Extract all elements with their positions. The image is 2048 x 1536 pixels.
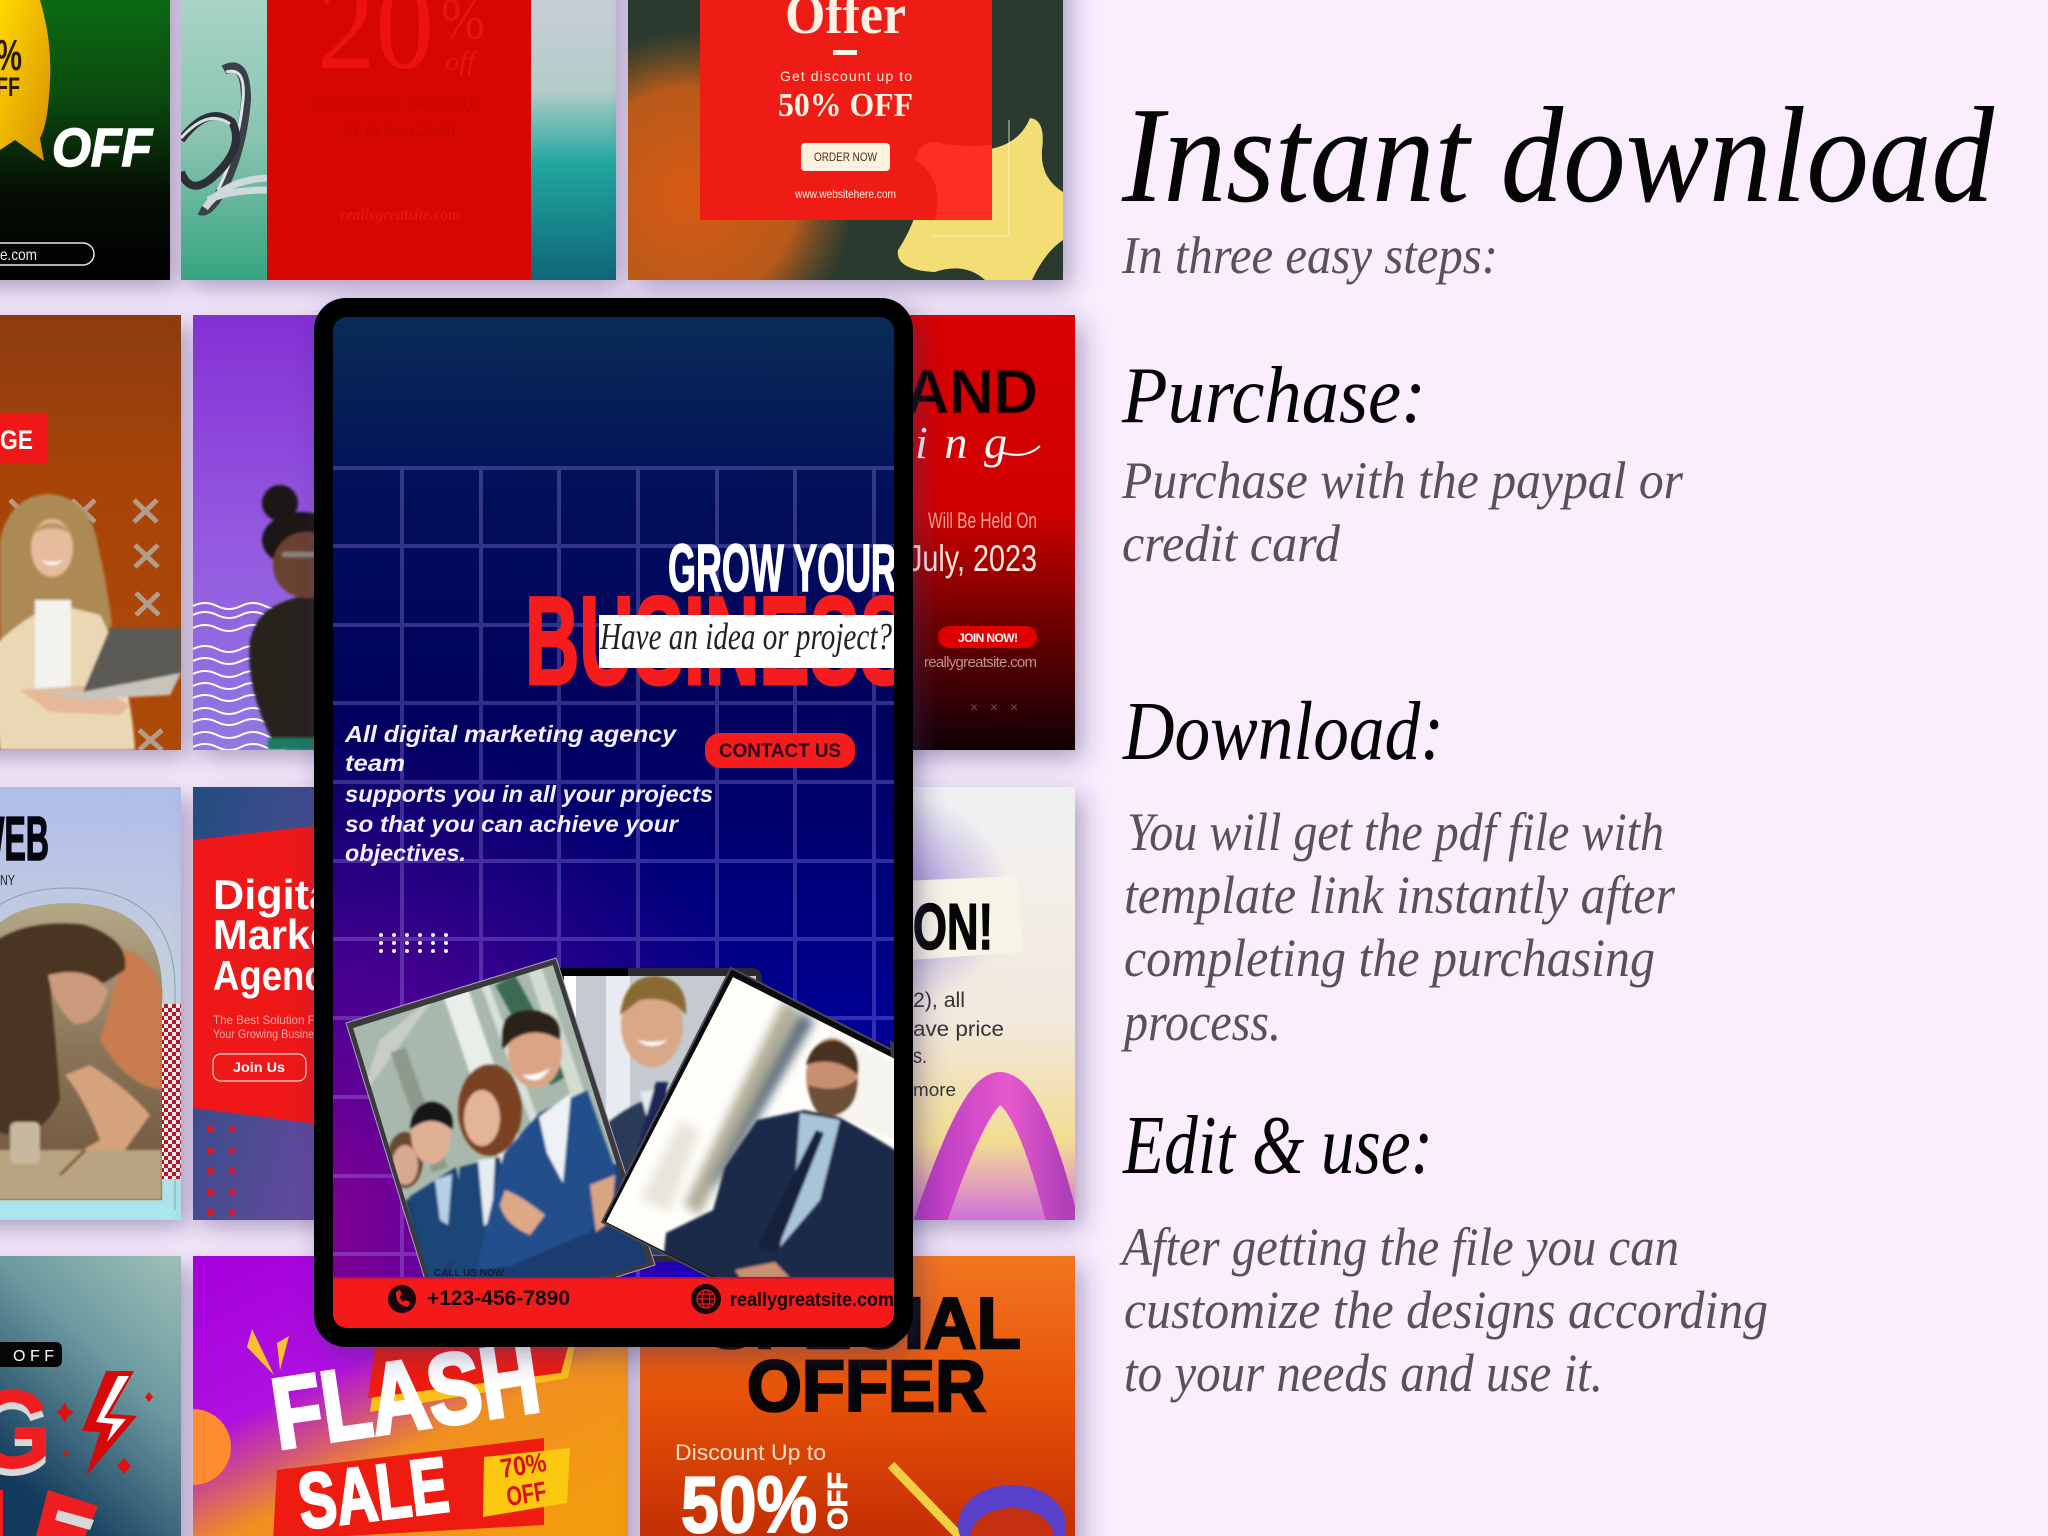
tile: pastel announcement template with pink arch: 2), all [913, 989, 965, 1012]
tile: special offer template [640, 1256, 1075, 1536]
tile: teal sale template with lightning bolt: OFF [13, 1348, 54, 1365]
tile: red event template with join button: JOIN NOW! [958, 631, 1018, 645]
step text: download: process. [1120, 992, 1281, 1052]
tile: green OFF badge template: e.com [0, 247, 37, 264]
tablet mockup [314, 298, 998, 1358]
tile: special offer template: Discount Up to [675, 1440, 826, 1465]
headline: grow your business: GROW YOUR [668, 531, 897, 606]
tile: red digital marketing agency template: Join Us [233, 1059, 285, 1075]
step text: download: You will get the pdf file with [1127, 802, 1664, 862]
tile: red event template with join button: × × × [970, 699, 1018, 715]
tile: flash sale template [155, 1256, 628, 1536]
headline: grow your business [529, 543, 894, 686]
step text: download: completing the purchasing [1124, 928, 1655, 988]
tile: green OFF badge template: OFF [52, 118, 154, 178]
step text: edit and use: After getting the file you can [1119, 1217, 1679, 1277]
step text: download: template link instantly after [1124, 865, 1676, 925]
step text: edit and use [1119, 1217, 1768, 1403]
step text: purchase: credit card [1122, 515, 1340, 573]
step text: purchase [1121, 452, 1683, 573]
step text: purchase: Purchase with the paypal or [1121, 452, 1683, 510]
tile: pastel announcement template with pink arch: more [913, 1080, 956, 1100]
website: reallygreatsite.com [730, 1290, 894, 1311]
tile: red event template with join button: ing [915, 417, 1007, 468]
step text: edit and use: customize the designs according [1124, 1280, 1768, 1340]
headline: grow your business: Have an idea or project? [599, 616, 892, 658]
tile: pastel web company template with woman in arch: NY [0, 872, 15, 889]
tile: flash sale template: OFF [504, 1476, 548, 1512]
left device photo [345, 957, 656, 1277]
tile: red event template with join button: reallygreatsite.com [924, 654, 1037, 671]
tile: special offer template: OFF [822, 1472, 853, 1530]
tile: special offer template: OFFER [747, 1347, 986, 1427]
subtitle: In three easy steps: [1121, 227, 1498, 285]
tile: pastel announcement template with pink arch: ON! [913, 890, 993, 963]
right device photo [600, 966, 894, 1277]
tile: flash sale template: FLASH [265, 1321, 546, 1471]
step heading: download: Download: [1122, 685, 1444, 778]
tile: orange template with woman and laptop [0, 315, 181, 750]
tile: pastel web company template with woman in arch [0, 787, 181, 1220]
headline: grow your business: BUSINESS! [525, 572, 935, 711]
screen grid [333, 468, 894, 1278]
step heading: purchase: Purchase: [1121, 352, 1426, 440]
tile: red 20% off template with chrome swirl: off [445, 47, 479, 76]
tile: pastel announcement template with pink arch: s. [913, 1045, 927, 1068]
phone icon [388, 1285, 416, 1313]
tile: red event template with join button: July, 2023 [908, 538, 1037, 579]
contact us button [705, 733, 855, 768]
tile: orange template with woman and laptop: GE [0, 425, 33, 455]
step text: download [1120, 802, 1676, 1052]
phone number: +123-456-7890 [427, 1287, 570, 1310]
tile: red offer template with yellow star: Get discount up to [780, 68, 912, 84]
tile: green OFF badge template [0, 0, 170, 280]
dot decoration [379, 933, 448, 953]
body copy: objectives. [345, 840, 466, 866]
tile: red digital marketing agency template: Market [213, 911, 347, 958]
tile: special offer template: SPECIAL [706, 1284, 1021, 1364]
tile: purple template with woman and waves [193, 315, 393, 750]
step heading: edit and use: Edit & use: [1122, 1099, 1433, 1192]
body copy: All digital marketing agency [344, 721, 677, 747]
tile: red event template with join button [880, 315, 1075, 750]
tile: red digital marketing agency template: Your Growing Business [213, 1027, 325, 1041]
small call us now caption: CALL US NOW [434, 1268, 505, 1279]
tile: red digital marketing agency template: The Best Solution For [213, 1013, 325, 1027]
contact bar [333, 1277, 894, 1328]
tile: red offer template with yellow star: ORDER NOW [814, 150, 878, 164]
tile: red 20% off template with chrome swirl: 21.10 from 20:00 [343, 121, 455, 140]
tile: red 20% off template with chrome swirl: reallygreatsite.com [340, 205, 460, 224]
globe icon [691, 1284, 721, 1314]
tile: flash sale template: 70% [498, 1447, 548, 1484]
tile: pastel announcement template with pink arch [880, 787, 1075, 1228]
step text: edit and use: to your needs and use it. [1124, 1343, 1603, 1403]
tile: red digital marketing agency template: Digital [213, 871, 345, 918]
middle device photo [558, 968, 762, 1262]
tile: red 20% off template with chrome swirl [181, 0, 616, 280]
body copy [344, 721, 713, 866]
contact us button: CONTACT US [719, 741, 841, 762]
body copy: supports you in all your projects [345, 781, 713, 807]
tile: red offer template with yellow star: 50% OFF [778, 87, 913, 124]
tile: red event template with join button: AND [905, 358, 1038, 427]
body copy: so that you can achieve your [345, 811, 679, 837]
tile: red offer template with yellow star [628, 0, 1063, 280]
tile: red 20% off template with chrome swirl: USE CODE AT CHECKOUT [315, 96, 481, 115]
tile: pastel announcement template with pink arch: ave price [913, 1018, 1004, 1041]
body copy: team [345, 750, 405, 776]
tile: teal sale template with lightning bolt [0, 1256, 181, 1536]
tile: red offer template with yellow star: www.websitehere.com [794, 187, 896, 201]
tile: red digital marketing agency template [193, 787, 393, 1220]
